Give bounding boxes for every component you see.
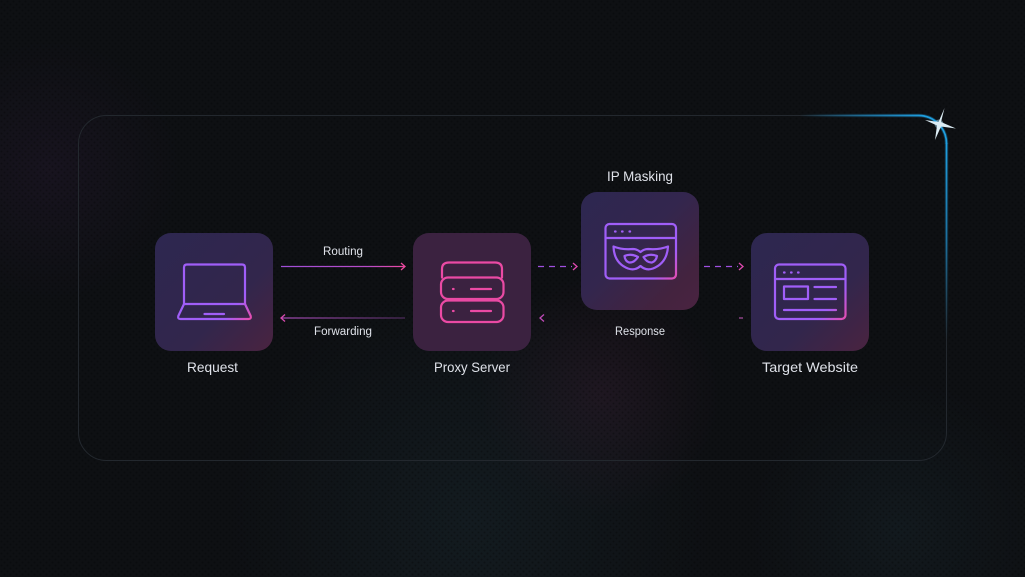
- label: target website: Target Website: [762, 359, 858, 375]
- icon: website layout: [775, 264, 846, 319]
- tile: ip masking: [581, 192, 699, 310]
- panel: target website: [751, 233, 869, 375]
- arrow: routing: [281, 263, 405, 270]
- tile: proxy server: [413, 233, 531, 351]
- label: proxy server: Proxy Server: [434, 359, 510, 375]
- panel: proxy server: [413, 233, 531, 375]
- icon: server stack: [441, 262, 504, 322]
- tile: target website: [751, 233, 869, 351]
- arrow: masking to target (dashed): [704, 263, 743, 270]
- icon: laptop: [178, 264, 251, 319]
- rounded frame with glowing corner: [78, 116, 946, 460]
- arrow: response back to proxy: [540, 314, 544, 322]
- panel: ip masking: [581, 168, 699, 338]
- arrow: forwarding: [281, 314, 405, 322]
- label: ip masking: IP Masking: [607, 168, 673, 184]
- icon: browser with mask: [606, 224, 676, 278]
- label: request: Request: [187, 359, 238, 375]
- arrow: proxy to masking (dashed): [538, 263, 577, 270]
- label: response: Response: [615, 326, 665, 338]
- label: forwarding: Forwarding: [314, 326, 372, 338]
- panel: request: [155, 233, 273, 375]
- arrow: response dash from target: [739, 317, 743, 319]
- label: routing: Routing: [323, 246, 363, 258]
- tile: request: [155, 233, 273, 351]
- icon: sparkle star: [925, 108, 956, 140]
